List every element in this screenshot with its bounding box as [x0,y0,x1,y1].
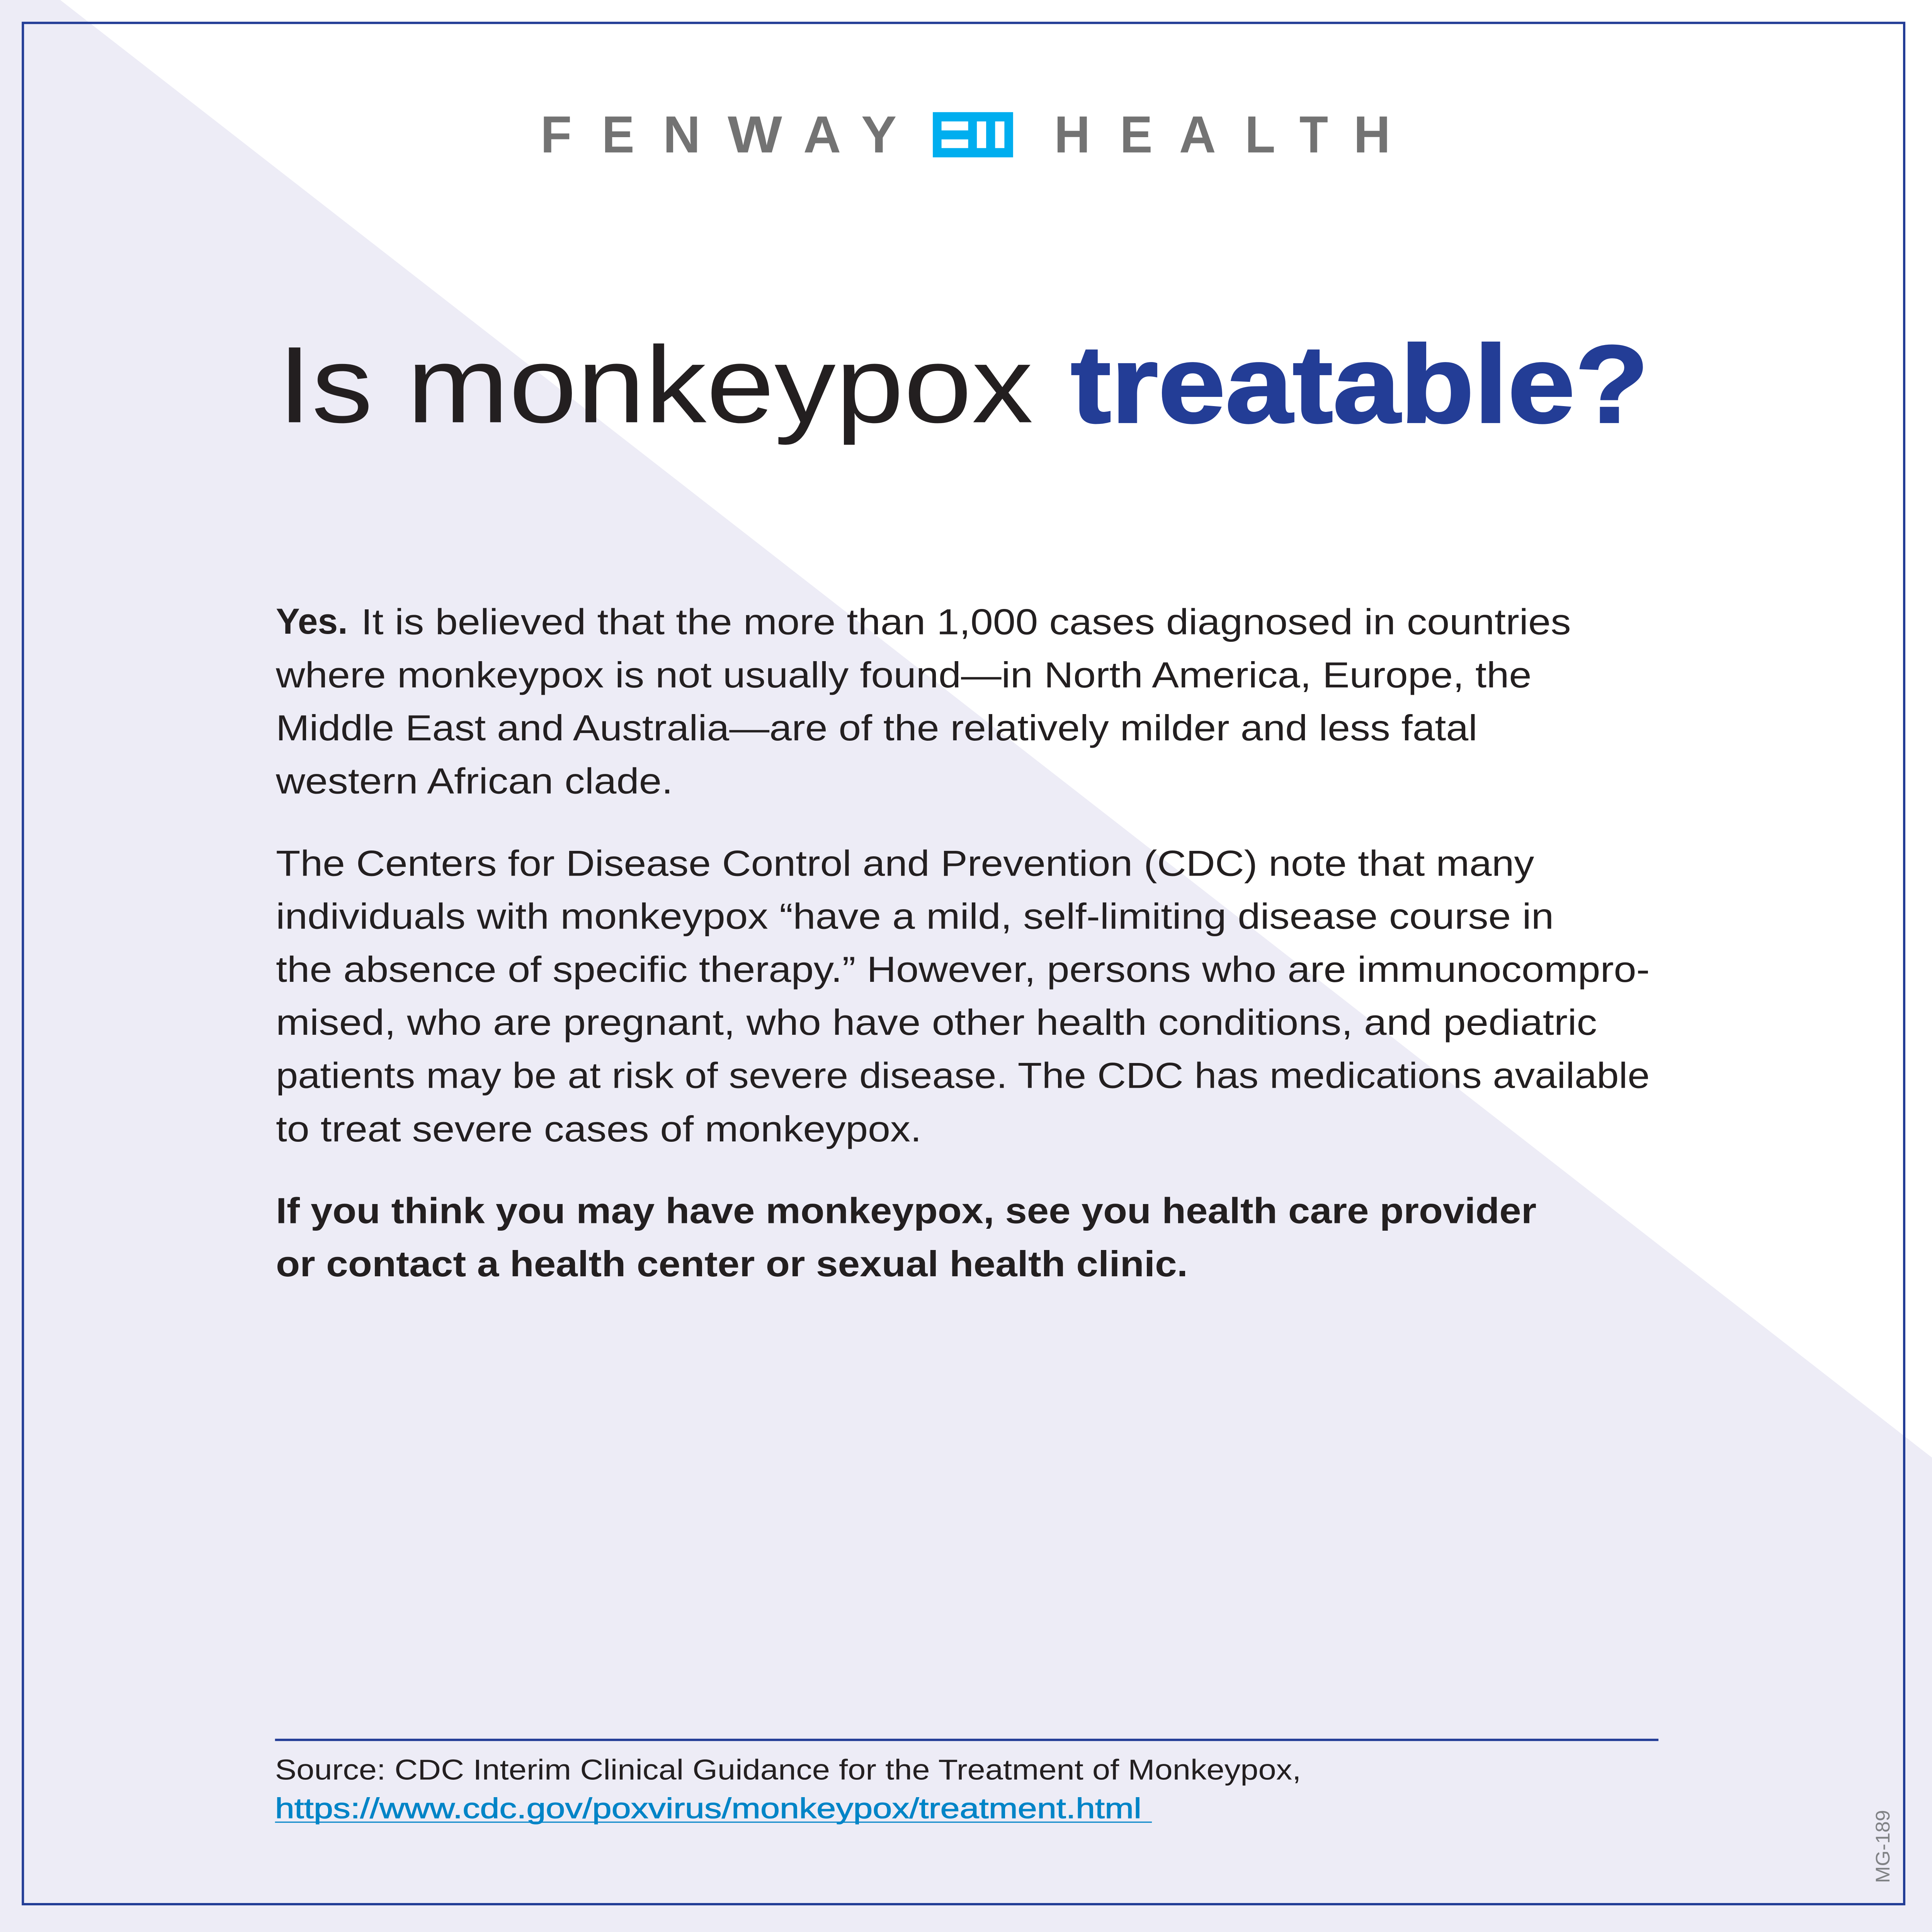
logo wordmark: Health: E [1120,105,1153,163]
title [277,323,1649,446]
callout: bold advice: or contact a health center or sexual health clinic. [276,1243,1188,1284]
text block: second paragraph: patients may be at risk of severe disease. The CDC has medications available [276,1055,1650,1095]
text block: second paragraph: individuals with monkeypox “have a mild, self-limiting disease course in [276,896,1554,937]
text block: second paragraph: the absence of specific therapy.” However, persons who are immunocompro- [276,949,1650,990]
logo wordmark: Health: H [1054,105,1090,163]
source citation: Source: CDC Interim Clinical Guidance for the Treatment of Monkeypox, [275,1754,1301,1786]
text block: first paragraph [276,601,1571,801]
source rule [275,1739,1658,1741]
logo wordmark: Fenway: F [541,105,572,163]
callout: bold advice [276,1190,1536,1284]
logo wordmark: Health: H [1354,105,1390,163]
logo wordmark: Health: T [1299,105,1328,163]
logo: Fenway Health [541,105,1390,163]
logo wordmark: Fenway [541,105,896,163]
source citation [275,1754,1301,1824]
text block: second paragraph [276,843,1650,1149]
text block: first paragraph: Middle East and Australia—are of the relatively milder and less fatal [276,707,1477,748]
text block: first paragraph: Yes. [276,601,348,641]
text block: first paragraph: western African clade. [276,760,673,801]
logo wordmark: Fenway: W [728,105,782,163]
logo wordmark: Health [1054,105,1390,163]
text block: second paragraph: to treat severe cases of monkeypox. [276,1109,922,1149]
text block: second paragraph: mised, who are pregnant, who have other health conditions, and pediatric [276,1002,1597,1043]
text block: first paragraph: It is believed that the more than 1,000 cases diagnosed in countries [361,602,1571,642]
title: bold part: treatable? [1071,323,1649,446]
logo wordmark: Fenway: E [602,105,634,163]
text block: first paragraph: where monkeypox is not usually found—in North America, Europe, the [276,655,1532,695]
icon: Fenway Health logo mark [933,112,1013,157]
logo wordmark: Health: L [1245,105,1276,163]
document code: MG-189: MG-189 [1872,1810,1894,1883]
source link: https://www.cdc.gov/poxvirus/monkeypox/treatment.html [275,1792,1141,1824]
text block: second paragraph: The Centers for Disease Control and Prevention (CDC) note that many [276,843,1534,883]
logo wordmark: Health: A [1179,105,1216,163]
logo wordmark: Fenway: N [663,105,701,163]
logo wordmark: Fenway: Y [861,105,896,163]
logo wordmark: Fenway: A [803,105,841,163]
title: regular part: Is monkeypox [277,324,1033,446]
callout: bold advice: If you think you may have monkeypox, see you health care provider [276,1190,1536,1231]
